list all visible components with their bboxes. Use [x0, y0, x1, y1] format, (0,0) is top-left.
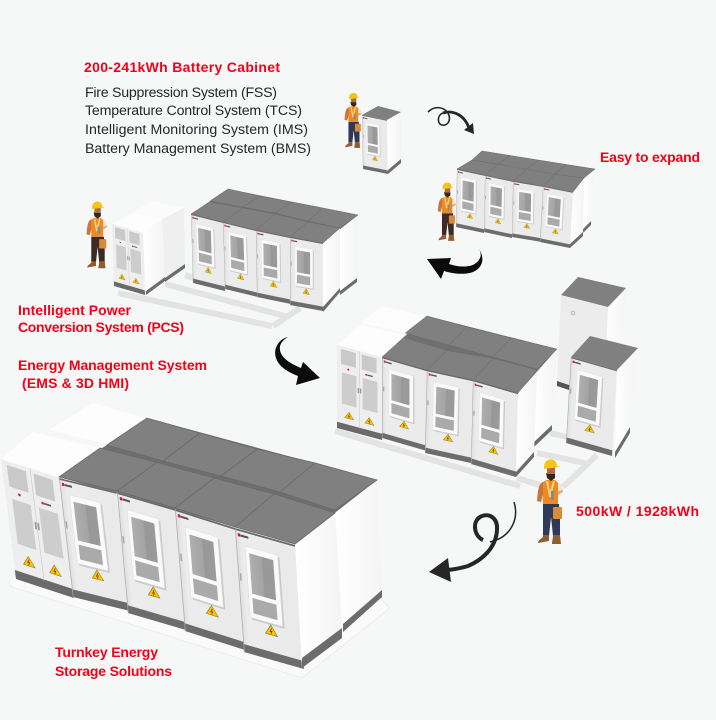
- label: PCS: [18, 302, 184, 335]
- power conversion cabinets: [1, 403, 145, 598]
- arrow: 500kW system to turnkey solution: [429, 502, 516, 582]
- back row of battery cabinets: [59, 418, 382, 632]
- text block: cabinet subsystems: Battery Management System (BMS): [85, 141, 311, 157]
- worker: beside single cabinet: [345, 93, 361, 148]
- arrow: PCS cluster to full system: [275, 337, 320, 385]
- text block: cabinet subsystems: Fire Suppression System (FSS): [85, 85, 277, 101]
- label: EMS: [18, 357, 207, 391]
- label: PCS: Conversion System (PCS): [18, 319, 184, 335]
- text block: cabinet subsystems: [85, 85, 311, 157]
- text block: cabinet subsystems: Temperature Control System (TCS): [85, 103, 302, 119]
- arrow: single cabinet to row: [428, 108, 474, 134]
- worker: at battery row: [438, 183, 456, 241]
- arrow: row to PCS cluster: [427, 249, 482, 279]
- cluster: 500kW system: [337, 306, 557, 477]
- worker: at 500kW system: [537, 459, 563, 544]
- label: PCS: Intelligent Power: [18, 302, 132, 318]
- cluster: PCS with battery row: [112, 189, 358, 312]
- label: turnkey: Turnkey Energy: [55, 644, 158, 660]
- cabinet: expansion battery cabinet: [566, 336, 638, 458]
- label: easy to expand: Easy to expand: [600, 149, 700, 165]
- label: turnkey: [55, 644, 172, 679]
- label: EMS: (EMS & 3D HMI): [22, 375, 129, 391]
- label: capacity: 500kW / 1928kWh: [576, 503, 699, 519]
- label: EMS: Energy Management System: [18, 357, 207, 373]
- title: battery cabinet: 200-241kWh Battery Cabinet: [84, 59, 280, 75]
- label: turnkey: Storage Solutions: [55, 663, 172, 679]
- text block: cabinet subsystems: Intelligent Monitoring System (IMS): [85, 122, 308, 138]
- base platform: [8, 570, 390, 678]
- front row of battery cabinets: [59, 448, 342, 669]
- frame: PCS cluster base: [118, 275, 300, 326]
- frame: 500kW system base: [335, 431, 597, 490]
- single battery cabinet: [362, 106, 401, 174]
- cabinet: tall EMS cabinet: [557, 277, 626, 395]
- cluster: turnkey energy storage solution: [1, 403, 390, 678]
- battery row: four by two: [456, 151, 595, 248]
- worker: at PCS cluster: [87, 201, 107, 268]
